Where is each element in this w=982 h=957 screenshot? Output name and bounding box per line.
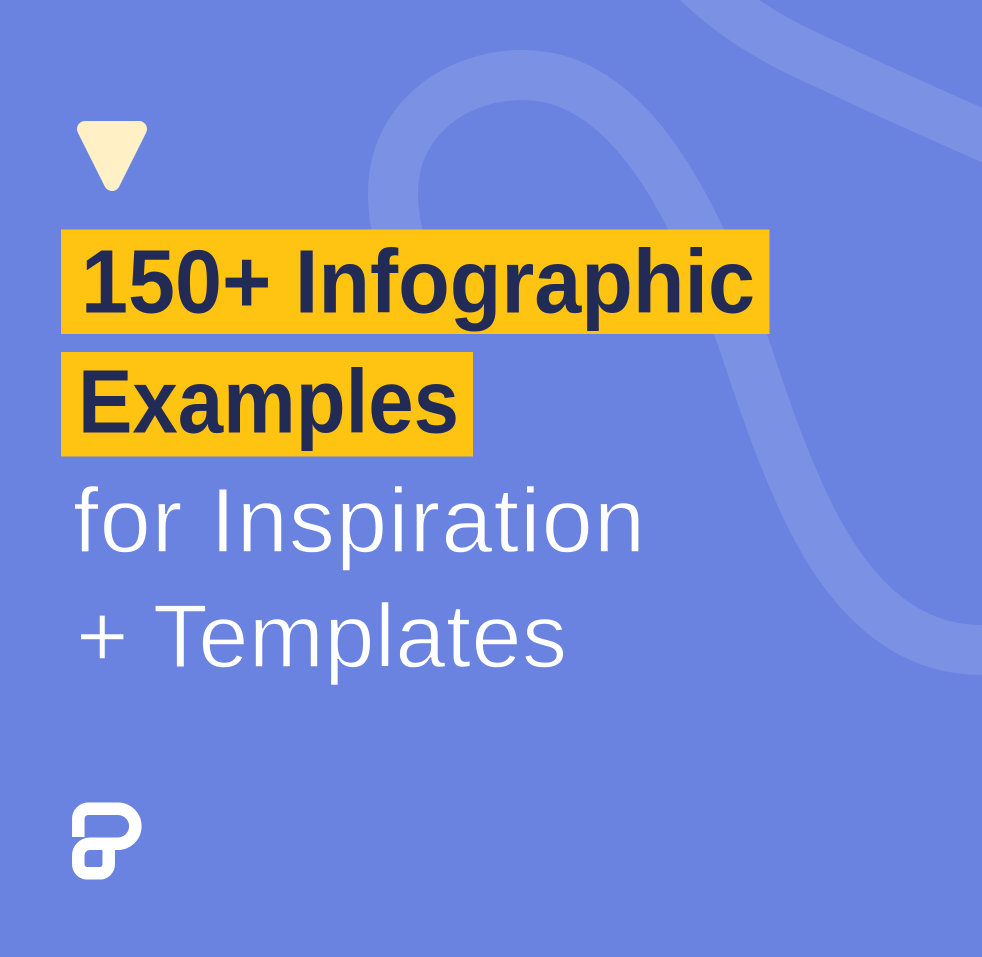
subheading line 2: + Templates: [76, 587, 567, 687]
icon: rounded triangle: [85, 129, 139, 183]
subheading line 1: for Inspiration: [73, 470, 645, 572]
heading line 2 highlight: Examples: [78, 352, 459, 452]
heading line 1 highlight: 150+ Infographic: [81, 232, 755, 332]
decorative swirl: main curve: [393, 75, 982, 650]
logo: [78, 809, 135, 873]
decorative swirl: top right curve: [690, 0, 982, 152]
